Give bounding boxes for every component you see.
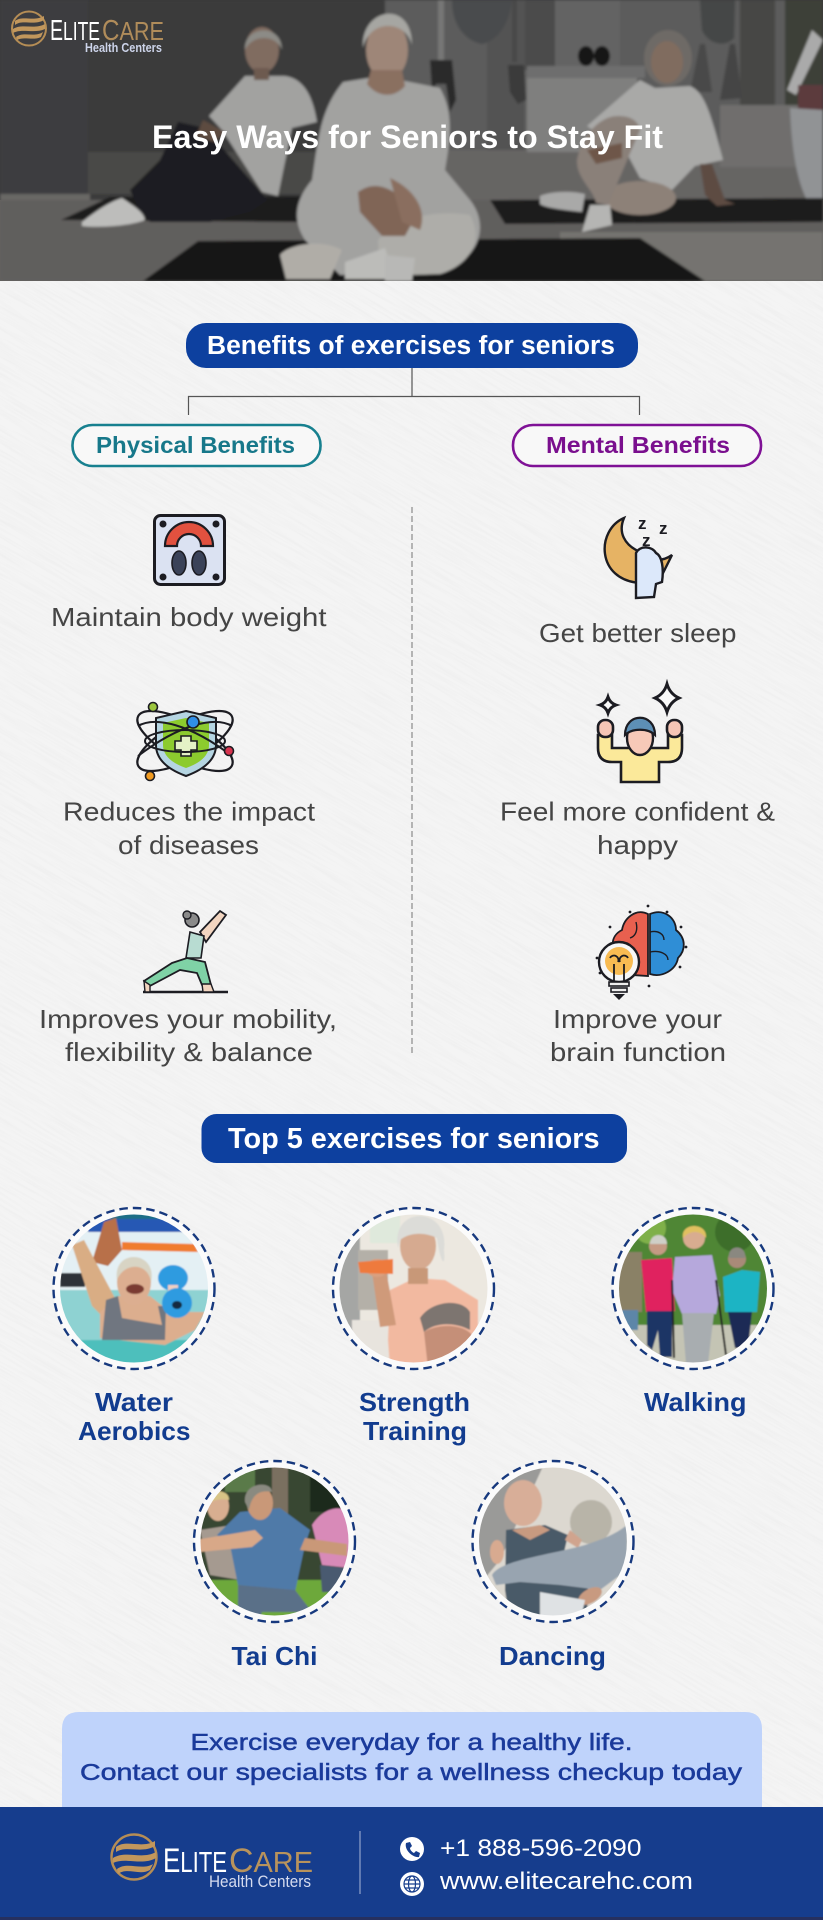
connector lines xyxy=(188,368,640,415)
heading pill: benefits of exercises: Benefits of exercises for seniors xyxy=(207,332,615,360)
header logo: ELITE xyxy=(50,15,100,47)
text: reduces the impact of diseases: of diseases xyxy=(118,830,259,860)
pill: mental benefits: Mental Benefits xyxy=(546,432,730,458)
photo circle: dancing xyxy=(472,1461,635,1622)
pill: physical benefits xyxy=(72,425,320,466)
title: Easy Ways for Seniors to Stay Fit xyxy=(152,119,663,155)
text: improve brain function: Improve your xyxy=(553,1004,722,1034)
mats xyxy=(61,196,463,222)
icon: brain and light bulb xyxy=(596,905,687,1000)
text: feel more confident and happy xyxy=(500,796,775,860)
label: dancing: Dancing xyxy=(499,1641,606,1671)
photo circle: tai chi xyxy=(194,1461,355,1625)
footer logo: Health Centers xyxy=(209,1872,311,1891)
label: walking: Walking xyxy=(644,1387,746,1417)
text: improve brain function xyxy=(550,1004,726,1067)
icon: happy person with sparkles xyxy=(598,684,682,782)
icon: sleeping moon: z xyxy=(638,514,646,533)
header logo: CARE xyxy=(102,15,164,47)
photo circle: water aerobics xyxy=(54,1208,215,1370)
text: get better sleep: Get better sleep xyxy=(539,618,736,648)
white storage box xyxy=(527,66,637,152)
text: improves mobility: Improves your mobility, xyxy=(39,1004,337,1034)
text: reduces the impact of diseases: Reduces the impact xyxy=(63,796,316,826)
header logo: Health Centers xyxy=(85,40,162,55)
icon: sleeping moon: z xyxy=(642,531,650,550)
heading pill: top 5 exercises: Top 5 exercises for seniors xyxy=(228,1123,600,1155)
callout: call to action: Contact our specialists for a wellness checkup today xyxy=(80,1759,742,1785)
footer logo: CARE xyxy=(229,1842,313,1880)
label: strength training: Training xyxy=(363,1416,467,1446)
text: improves mobility: flexibility & balance xyxy=(65,1037,313,1067)
pill: mental benefits xyxy=(513,425,761,466)
label: water aerobics: Aerobics xyxy=(78,1416,190,1446)
icon: globe xyxy=(400,1872,424,1896)
icon: phone xyxy=(400,1837,424,1861)
centre woman xyxy=(297,78,480,275)
icon: weighing scale xyxy=(154,516,224,584)
photo circle: strength training xyxy=(333,1208,495,1370)
footer logo: ELITE xyxy=(163,1842,227,1880)
label: water aerobics: Water xyxy=(95,1387,173,1417)
right woman xyxy=(644,30,692,86)
label: strength training xyxy=(359,1387,470,1446)
heading pill: benefits of exercises xyxy=(186,323,638,368)
text: reduces the impact of diseases xyxy=(63,796,316,860)
left woman xyxy=(209,76,317,196)
text: improve brain function: brain function xyxy=(550,1037,726,1067)
callout: call to action: Exercise everyday for a healthy life. xyxy=(190,1729,632,1755)
text: feel more confident and happy: happy xyxy=(597,830,678,860)
text: maintain body weight: Maintain body weight xyxy=(51,602,327,632)
label: tai chi: Tai Chi xyxy=(232,1641,318,1671)
text: improves mobility xyxy=(39,1004,337,1067)
dashed column divider xyxy=(411,507,413,1056)
icon: sleeping moon: z xyxy=(659,519,668,538)
header logo xyxy=(12,12,164,55)
hero photo: three seniors on exercise mats xyxy=(0,0,823,281)
text: website: www.elitecarehc.com xyxy=(439,1868,693,1895)
icon: sleeping moon xyxy=(605,514,672,598)
icon: shield with atom orbits xyxy=(129,699,241,783)
footer band xyxy=(0,1807,823,1920)
label: water aerobics xyxy=(78,1387,190,1446)
text: feel more confident and happy: Feel more confident & xyxy=(500,796,775,826)
icon: yoga pose xyxy=(143,911,228,992)
callout: call to action xyxy=(62,1712,762,1807)
heading pill: top 5 exercises xyxy=(202,1114,627,1163)
label: strength training: Strength xyxy=(359,1387,470,1417)
photo circle: walking xyxy=(612,1208,775,1370)
footer logo xyxy=(112,1834,313,1891)
hanging straps xyxy=(452,0,512,44)
text: phone number: +1 888-596-2090 xyxy=(440,1835,642,1862)
pill: physical benefits: Physical Benefits xyxy=(96,432,295,458)
